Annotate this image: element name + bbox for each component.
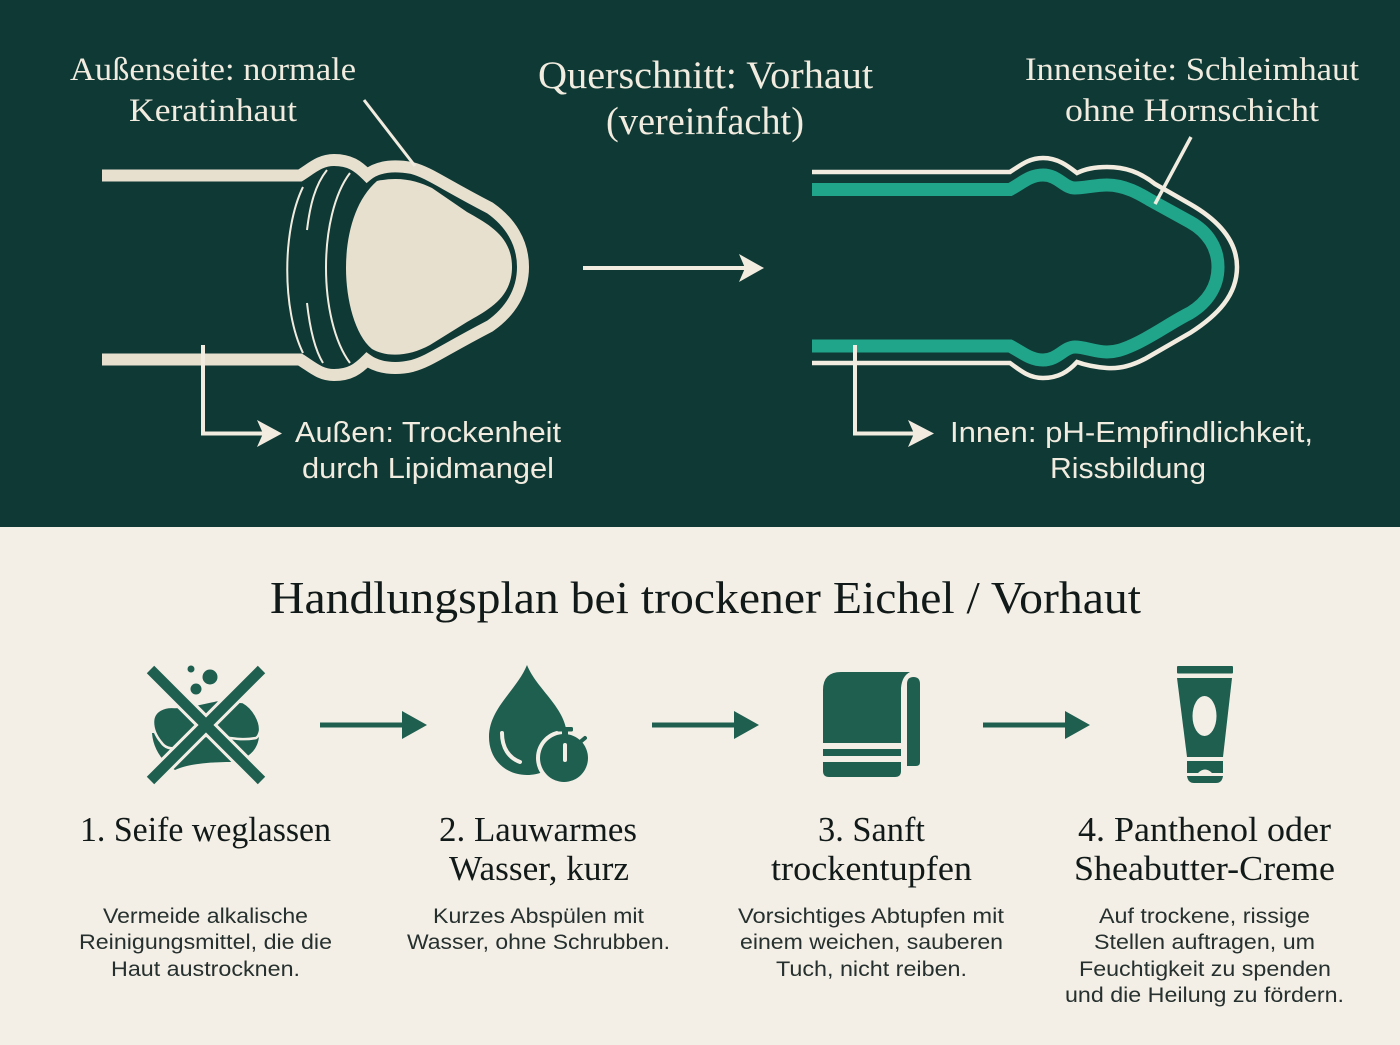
arrow: step 3 to 4 (983, 711, 1090, 739)
pointer: outer skin (364, 100, 415, 166)
step 4 text: Feuchtigkeit zu spenden (1079, 957, 1331, 981)
label: outer dryness (295, 417, 561, 485)
label: inner side (1025, 52, 1359, 129)
step 2 text: Kurzes Abspülen mit (433, 904, 644, 928)
label: inner sensitivity: Rissbildung (1050, 453, 1206, 485)
icon: towel (823, 672, 920, 777)
step 3 heading (771, 810, 972, 888)
icon: crossed-out soap (150, 666, 262, 780)
label: outer side (70, 52, 356, 129)
panel: anatomy cross-section (0, 0, 1400, 527)
arrow: step 1 to 2 (320, 711, 427, 739)
step 4 text: Stellen auftragen, um (1094, 930, 1315, 954)
step 2 heading: Wasser, kurz (449, 849, 629, 888)
title: Handlungsplan bei trockener Eichel / Vorhaut (270, 572, 1141, 623)
label: inner sensitivity: Innen: pH-Empfindlichkeit, (950, 417, 1313, 449)
label: outer dryness: Außen: Trockenheit (295, 417, 561, 449)
heading: cross-section: (vereinfacht) (606, 100, 804, 143)
heading: cross-section (538, 54, 873, 143)
step 4 text: und die Heilung zu fördern. (1065, 983, 1344, 1007)
step 3 text: Tuch, nicht reiben. (776, 957, 967, 981)
step 3 heading: 3. Sanft (818, 810, 925, 849)
label: inner sensitivity (950, 417, 1313, 485)
step 3 text: einem weichen, sauberen (740, 930, 1003, 954)
step 2 heading: 2. Lauwarmes (439, 810, 637, 849)
step 4 text: Auf trockene, rissige (1099, 904, 1310, 928)
label: outer side: Keratinhaut (129, 93, 297, 129)
icon: cream tube (1177, 666, 1233, 783)
step 2 text: Wasser, ohne Schrubben. (407, 930, 670, 954)
label: outer dryness: durch Lipidmangel (302, 453, 554, 485)
step 4 heading (1074, 810, 1335, 888)
step 4 text (1065, 904, 1344, 1007)
arrow: to inner sensitivity label (855, 345, 934, 447)
label: inner side: Innenseite: Schleimhaut (1025, 52, 1359, 88)
step 4 heading: 4. Panthenol oder (1078, 810, 1331, 849)
step 4 heading: Sheabutter-Creme (1074, 849, 1335, 888)
step 3 heading: trockentupfen (771, 849, 972, 888)
step 2 text (407, 904, 670, 954)
pointer: mucosa (1155, 137, 1191, 204)
step 1 heading: 1. Seife weglassen (80, 810, 331, 849)
step 2 heading (439, 810, 637, 888)
step 1 text (79, 904, 332, 981)
step 3 text (738, 904, 1004, 981)
step 1 text: Vermeide alkalische (103, 904, 308, 928)
step 1 text: Reinigungsmittel, die die (79, 930, 332, 954)
heading: cross-section: Querschnitt: Vorhaut (538, 54, 873, 97)
label: outer side: Außenseite: normale (70, 52, 356, 88)
diagram: cross-section with mucosa (812, 158, 1237, 378)
panel: action plan (0, 527, 1400, 1045)
arrow: outer to cross-section (583, 254, 764, 282)
step 1 text: Haut austrocknen. (111, 957, 300, 981)
step 3 text: Vorsichtiges Abtupfen mit (738, 904, 1004, 928)
icon: water drop with stopwatch (489, 665, 592, 786)
arrow: step 2 to 3 (652, 711, 759, 739)
arrow: to outer dryness label (203, 345, 282, 447)
label: inner side: ohne Hornschicht (1065, 93, 1319, 129)
diagram: outer view with retracted skin (102, 160, 523, 375)
